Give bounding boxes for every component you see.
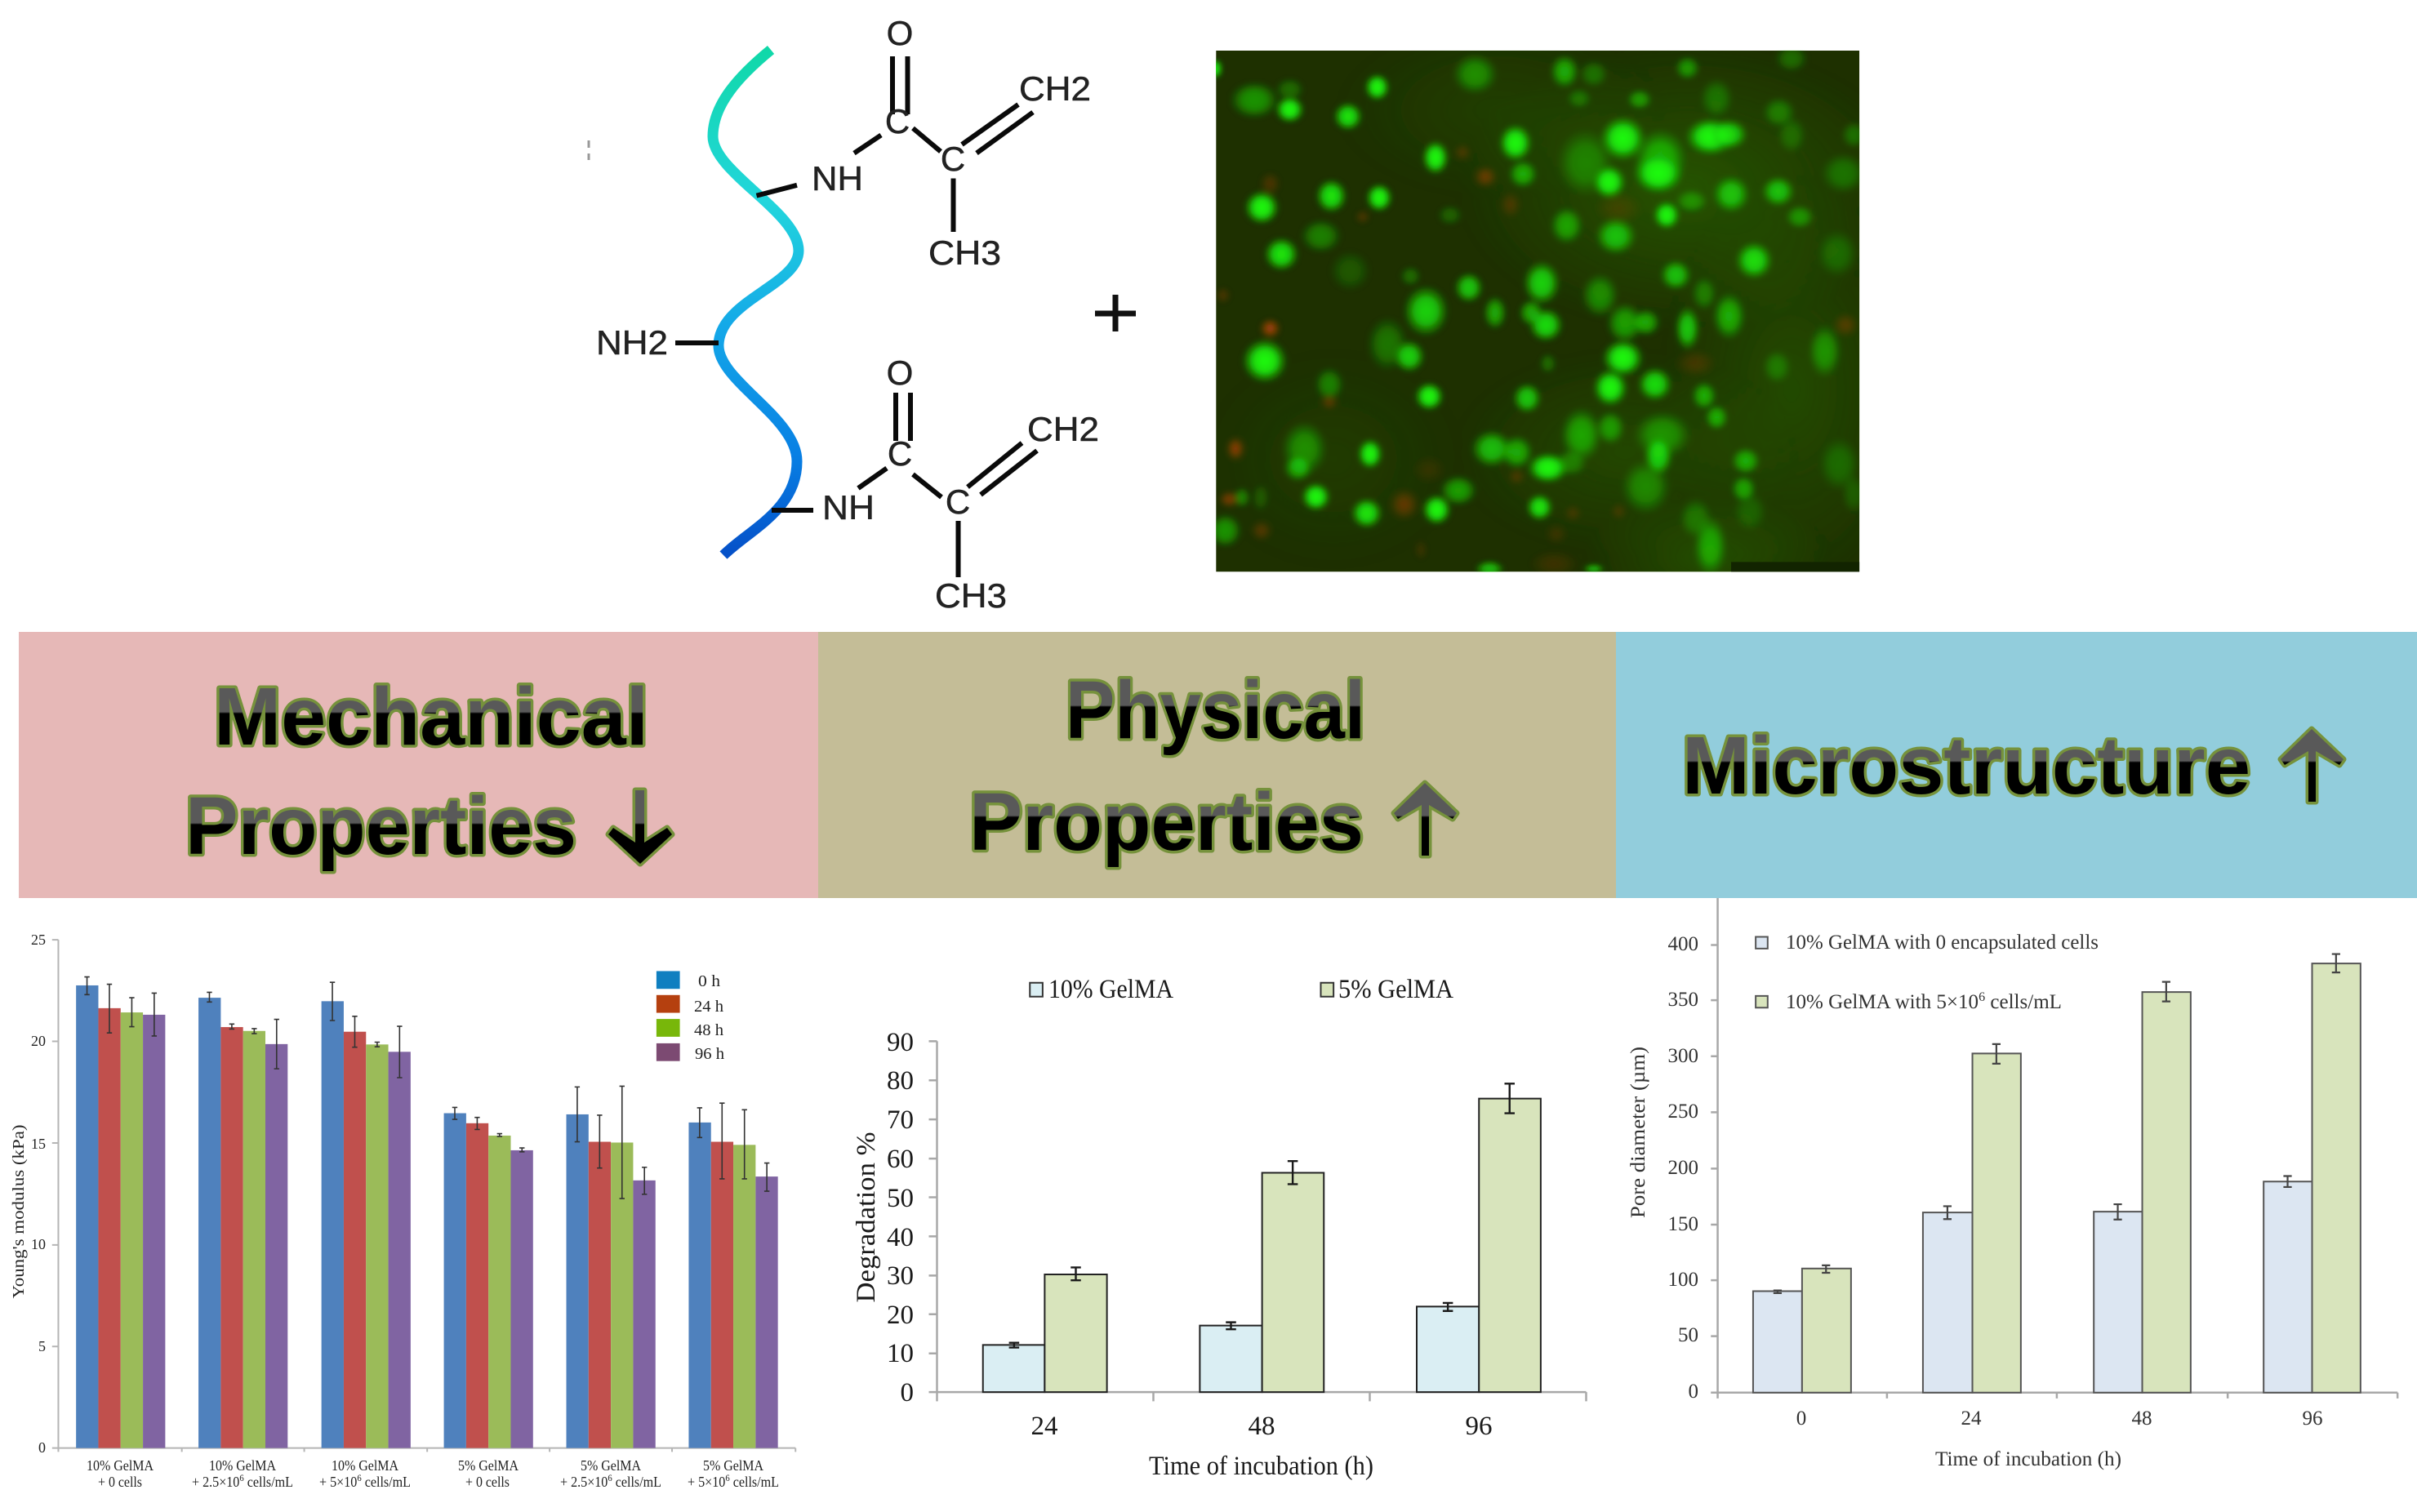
bars: 5% GelMA + 5e6 cells/mL	[688, 1103, 778, 1448]
y axis tick labels: 30	[887, 1261, 914, 1291]
x axis category labels: + 5×10	[319, 1474, 362, 1490]
y axis tick labels: 15	[31, 1136, 46, 1152]
y axis tick labels: 250	[1667, 1101, 1698, 1123]
y axis tick labels: 200	[1667, 1157, 1698, 1179]
x axis category labels: 10% GelMA	[332, 1457, 398, 1474]
y axis tick labels	[887, 1028, 914, 1407]
x axis category labels: + 0 cells	[98, 1474, 142, 1490]
lower methacrylamide group	[772, 354, 1099, 615]
y axis tick labels: 70	[887, 1105, 914, 1135]
x axis category labels: 24	[1030, 1412, 1058, 1441]
legend labels: 96 h	[695, 1045, 724, 1063]
x axis category labels	[1030, 1412, 1493, 1441]
heading: Physical Properties: Physical	[1066, 665, 1365, 756]
y axis tick labels: 10	[31, 1236, 46, 1252]
x axis title: Time of incubation (h)	[1149, 1452, 1373, 1481]
x axis category labels: cells/mL	[362, 1474, 411, 1490]
legend labels: 5% GelMA	[1338, 975, 1453, 1004]
GelMA molecule diagram	[589, 14, 1099, 615]
bars: 48 h	[1200, 1173, 1324, 1392]
upper methacrylamide group: CH2	[1019, 69, 1091, 108]
legend labels: 48 h	[694, 1021, 723, 1039]
heading: Physical Properties	[969, 665, 1365, 868]
heading: Microstructure: Microstructure	[1682, 720, 2250, 812]
y axis tick labels	[31, 932, 46, 1456]
x axis category labels: + 2.5×10	[560, 1474, 613, 1490]
x axis category labels: 5% GelMA	[703, 1457, 763, 1474]
bars: 5% GelMA + 2.5e6 cells/mL	[567, 1086, 656, 1448]
stray mark	[588, 140, 590, 160]
bars: 96 h	[2263, 963, 2361, 1393]
bars: 24 h	[983, 1274, 1107, 1392]
x axis category labels: 5% GelMA	[581, 1457, 641, 1474]
bars: 24 h	[1923, 1053, 2021, 1393]
x axis category labels: 6	[725, 1472, 730, 1483]
error bars	[1009, 1083, 1515, 1348]
y axis tick labels: 300	[1667, 1045, 1698, 1067]
legend labels: 10% GelMA with 5×10	[1786, 991, 1979, 1013]
y axis tick labels: 60	[887, 1145, 914, 1174]
y axis tick labels: 0	[1689, 1381, 1698, 1403]
heading: Physical Properties: Properties	[969, 776, 1364, 868]
x axis category labels: 10% GelMA	[209, 1457, 276, 1474]
lower methacrylamide group: C	[946, 483, 970, 521]
arrow: up	[2281, 729, 2344, 802]
lower methacrylamide group: CH2	[1027, 410, 1099, 448]
legend swatches	[1756, 936, 1768, 1007]
lower methacrylamide group: C	[888, 434, 912, 473]
y axis tick labels: 50	[1678, 1324, 1698, 1346]
upper methacrylamide group: C	[885, 102, 910, 140]
x axis category labels: 24	[1961, 1407, 1982, 1430]
legend labels	[1786, 932, 2099, 1013]
lower methacrylamide group: NH	[822, 488, 875, 527]
chart 2 plot area	[929, 983, 1586, 1401]
x axis category labels: + 5×10	[688, 1474, 730, 1490]
legend labels: 24 h	[694, 998, 723, 1016]
x axis category labels: 6	[357, 1472, 362, 1483]
legend swatches	[1030, 983, 1333, 997]
bar chart: degradation	[852, 975, 1586, 1481]
bars: 10% GelMA + 2.5e6 cells/mL	[198, 992, 287, 1448]
heading: Mechanical Properties: Mechanical	[214, 671, 648, 763]
upper methacrylamide group: CH3	[928, 233, 1001, 272]
legend labels: cells/mL	[1985, 991, 2062, 1013]
y axis tick labels: 25	[31, 932, 46, 948]
polymer ribbon	[713, 50, 799, 555]
y axis tick labels: 40	[887, 1223, 914, 1252]
legend swatches	[657, 971, 680, 1061]
bars: 48 h	[2094, 992, 2191, 1393]
bars: 10% GelMA + 5e6 cells/mL	[322, 982, 411, 1448]
bars: 96 h	[1417, 1099, 1541, 1392]
y axis tick labels: 10	[887, 1339, 914, 1368]
arrow: down	[608, 790, 672, 864]
legend labels	[694, 972, 724, 1063]
x axis category labels	[1796, 1407, 2322, 1430]
heading: Mechanical Properties: Properties	[185, 780, 576, 872]
legend labels: 10% GelMA with 0 encapsulated cells	[1786, 932, 2099, 954]
y axis tick labels: 150	[1667, 1213, 1698, 1235]
chart 1 plot area	[52, 940, 795, 1452]
x axis category labels: 48	[1248, 1412, 1275, 1441]
x axis category labels: cells/mL	[612, 1474, 661, 1490]
error bars	[1774, 954, 2340, 1293]
x axis category labels: 96	[1465, 1412, 1493, 1441]
upper methacrylamide group: C	[941, 140, 965, 178]
y axis title: Pore diameter (µm)	[1627, 1047, 1649, 1218]
x axis category labels	[87, 1457, 779, 1490]
amine group: NH2	[596, 323, 668, 362]
upper methacrylamide group: NH	[812, 159, 863, 198]
bar chart: pore diameter	[1627, 898, 2397, 1470]
bars: 10% GelMA + 0 cells	[76, 977, 165, 1448]
x axis category labels: + 2.5×10	[192, 1474, 245, 1490]
x axis category labels: 96	[2303, 1407, 2322, 1430]
x axis category labels: 10% GelMA	[87, 1457, 154, 1474]
y axis title: Young's modulus (kPa)	[10, 1125, 28, 1298]
x axis title: Time of incubation (h)	[1935, 1448, 2121, 1470]
x axis category labels: 48	[2131, 1407, 2152, 1430]
y axis tick labels: 90	[887, 1028, 914, 1057]
panel: mechanical properties banner	[19, 632, 819, 898]
y axis tick labels: 80	[887, 1066, 914, 1096]
y axis tick labels: 50	[887, 1184, 914, 1213]
lower methacrylamide group: CH3	[935, 576, 1007, 615]
y axis title: Degradation %	[852, 1132, 881, 1303]
x axis category labels: 6	[239, 1472, 244, 1483]
upper methacrylamide group: O	[887, 14, 913, 52]
y axis tick labels: 5	[38, 1338, 46, 1354]
y axis tick labels: 400	[1667, 933, 1698, 955]
x axis category labels: cells/mL	[244, 1474, 293, 1490]
bar chart: Young's modulus	[10, 932, 795, 1490]
legend labels: 10% GelMA	[1048, 975, 1173, 1004]
fluorescence micrograph of cells	[1216, 51, 1860, 571]
panel: microstructure banner	[1616, 632, 2417, 898]
y axis tick labels: 0	[900, 1378, 914, 1407]
panel: physical properties banner	[818, 632, 1616, 898]
y axis tick labels: 350	[1667, 989, 1698, 1011]
x axis category labels: + 0 cells	[465, 1474, 510, 1490]
y axis tick labels: 20	[887, 1301, 914, 1330]
heading: Mechanical Properties	[185, 671, 648, 872]
legend labels: 6	[1979, 990, 1985, 1004]
bars: 0 h	[1753, 1269, 1851, 1393]
x axis category labels: 6	[608, 1472, 612, 1483]
upper methacrylamide group	[756, 14, 1091, 272]
y axis tick labels	[1667, 933, 1698, 1403]
lower methacrylamide group: O	[887, 354, 913, 392]
chart 3 plot area	[1711, 898, 2397, 1399]
y axis tick labels: 100	[1667, 1269, 1698, 1291]
y axis tick labels: 20	[31, 1033, 46, 1049]
x axis category labels: 5% GelMA	[458, 1457, 519, 1474]
bars: 5% GelMA + 0 cells	[444, 1107, 533, 1448]
x axis category labels: cells/mL	[730, 1474, 779, 1490]
legend labels	[1048, 975, 1453, 1004]
x axis category labels: 0	[1796, 1407, 1806, 1430]
plus sign	[1095, 295, 1136, 331]
legend labels: 0 h	[698, 972, 720, 990]
y axis tick labels: 0	[38, 1439, 46, 1456]
arrow: up	[1394, 783, 1457, 856]
